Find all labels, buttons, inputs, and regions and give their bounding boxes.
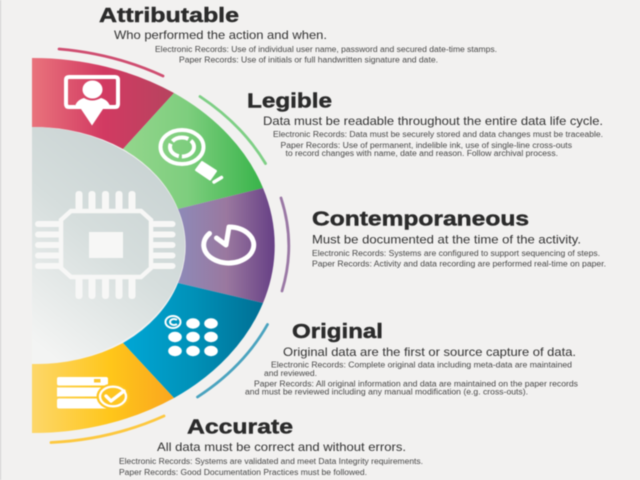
accent arcs	[51, 49, 289, 442]
heading: Original	[292, 320, 383, 343]
electronic records: Electronic Records: Data must be securely stored and data changes must be traceable.	[273, 130, 603, 139]
text block: accurate	[119, 416, 423, 477]
text block: original	[245, 320, 578, 396]
definition: Must be documented at the time of the activity.	[312, 232, 581, 246]
icon: microchip	[35, 191, 176, 299]
segment: attributable	[32, 58, 174, 149]
heading: Contemporaneous	[312, 208, 529, 230]
text block: attributable	[99, 4, 497, 64]
arc: accurate	[51, 416, 164, 442]
text block: contemporaneous	[312, 208, 606, 268]
semicircle diagram	[32, 58, 275, 433]
centre semicircle	[32, 127, 185, 364]
arc: legible	[200, 96, 266, 164]
segment: accurate	[32, 343, 174, 433]
electronic records: Electronic Records: Complete original data including meta-data are maintained	[271, 360, 572, 370]
segment: original	[123, 283, 263, 398]
paper records continued: and must be reviewed including any manual modification (e.g. cross-outs).	[245, 388, 528, 396]
paper records: Paper Records: Use of initials or full handwritten signature and date.	[179, 56, 438, 64]
icon: magnifier	[160, 130, 222, 182]
paper records: Paper Records: Good Documentation Practices must be followed.	[119, 468, 367, 477]
heading: Legible	[247, 90, 332, 112]
icon: person pin	[66, 77, 118, 126]
icon: server check	[57, 377, 130, 410]
icon: clock	[204, 227, 254, 263]
electronic records: Electronic Records: Use of individual user name, password and secured date-time stamps.	[155, 45, 497, 54]
electronic records: Electronic Records: Systems are validated and meet Data Integrity requirements.	[119, 457, 423, 466]
segment: contemporaneous	[178, 188, 275, 303]
arc: contemporaneous	[281, 198, 289, 291]
paper records: Paper Records: All original information and data are maintained on the paper records	[254, 380, 578, 388]
electronic records: Electronic Records: Systems are configured to support sequencing of steps.	[312, 249, 600, 258]
paper records: Paper Records: Use of permanent, indelible ink, use of single-line cross-outs	[280, 141, 572, 150]
definition: Who performed the action and when.	[114, 28, 327, 42]
icon: keypad with copyright	[166, 316, 218, 356]
definition: Original data are the first or source capture of data.	[283, 345, 576, 359]
heading: Attributable	[99, 4, 239, 27]
paper records continued: to record changes with name, date and reason. Follow archival process.	[286, 149, 558, 158]
arc: original	[198, 324, 268, 397]
paper records: Paper Records: Activity and data recording are performed real-time on paper.	[312, 260, 606, 268]
definition: All data must be correct and without errors.	[157, 440, 406, 454]
text block: legible	[247, 90, 603, 158]
electronic records continued: and reviewed.	[264, 369, 317, 378]
arc: attributable	[59, 49, 163, 76]
heading: Accurate	[187, 416, 293, 438]
definition: Data must be readable throughout the entire data life cycle.	[263, 114, 603, 128]
left edge line	[0, 0, 1, 480]
segment: legible	[123, 93, 263, 209]
